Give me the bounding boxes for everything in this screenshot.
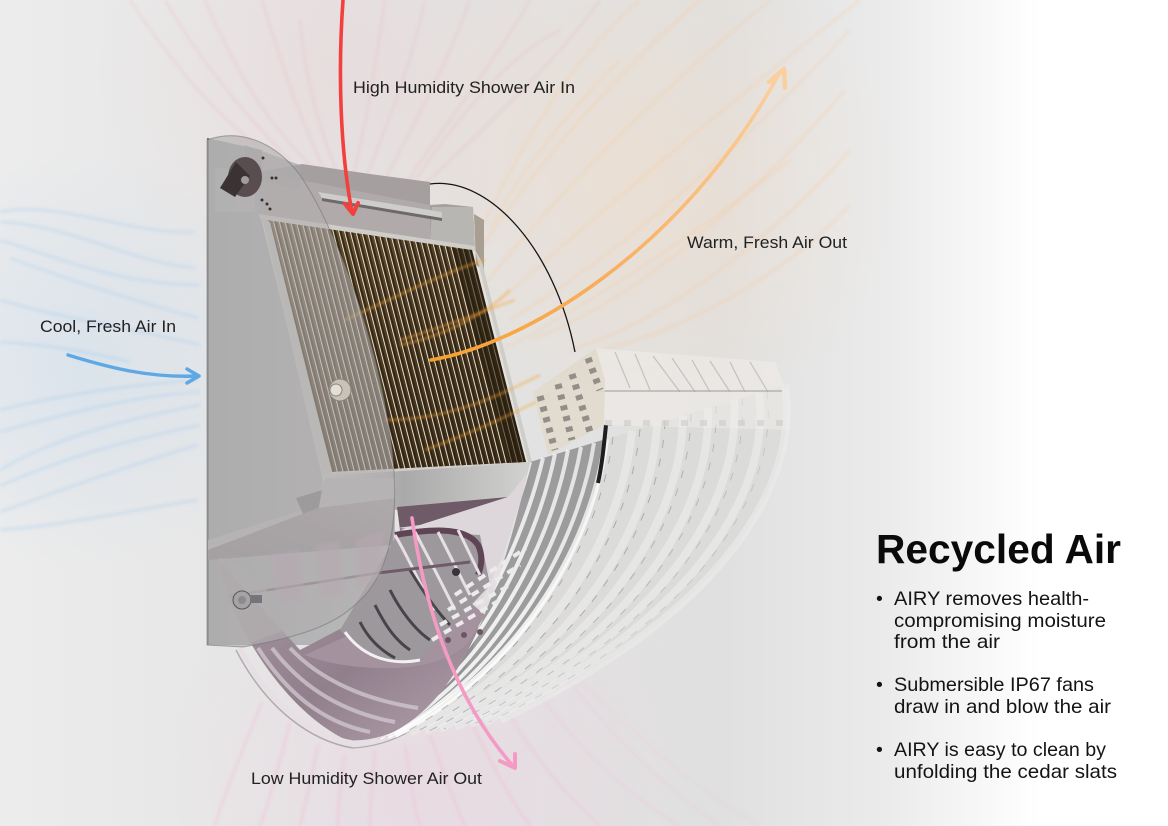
bullet list: •: [876, 588, 883, 610]
crossing slat gaps (light squares): [432, 548, 526, 640]
acrylic fastener: [329, 379, 351, 401]
label: high humidity shower air in: High Humidity Shower Air In: [353, 78, 575, 97]
device: AIRY unit: [207, 136, 790, 748]
black wire: [430, 183, 575, 352]
ledge under body: [208, 498, 395, 560]
arrow: high humidity air in: [340, 0, 358, 214]
orange flow seen through the exchanger: [345, 260, 550, 450]
bullet list: AIRY removes health-: [894, 588, 1089, 610]
arrow: cool fresh air in: [68, 355, 199, 383]
orange airflow wisps: [440, 0, 860, 380]
arrow: low humidity air out: [412, 518, 515, 768]
blue airflow wisps: [0, 209, 200, 530]
red airflow wisps: [130, 0, 600, 185]
bullet list: compromising moisture: [894, 610, 1106, 632]
fan mechanism behind flap: [230, 530, 490, 662]
exchanger frame: [262, 218, 532, 480]
bowl of folded slats: [218, 560, 485, 748]
bullet list: AIRY is easy to clean by: [894, 739, 1106, 761]
bullet list: •: [876, 674, 883, 696]
dark sliver under band: [397, 497, 508, 530]
bullet list: •: [876, 739, 883, 761]
panel: recycled air text: [876, 526, 1121, 783]
pale area beneath band: [397, 470, 530, 610]
bullet list: [876, 588, 1117, 783]
unfolding cedar slat fan: [350, 385, 790, 745]
pink airflow wisps: [215, 515, 760, 826]
label: cool fresh air in: Cool, Fresh Air In: [40, 317, 176, 336]
top ends of slats: [595, 348, 790, 430]
heading: Recycled Air: [876, 526, 1121, 572]
heat exchanger fins: [262, 218, 532, 480]
top housing: [245, 145, 484, 270]
label: low humidity shower air out: Low Humidity Shower Air Out: [251, 769, 482, 788]
silver lower band: [208, 463, 530, 552]
clear acrylic end disc: [207, 136, 395, 647]
label: warm fresh air out: Warm, Fresh Air Out: [687, 233, 847, 252]
bullet list: Submersible IP67 fans: [894, 674, 1094, 696]
bullet list: draw in and blow the air: [894, 696, 1112, 718]
bullet list: from the air: [894, 631, 1001, 653]
arrow: warm fresh air out: [431, 69, 785, 360]
mauve reflections in disc: [270, 530, 385, 605]
bolt on flap pivot: [233, 591, 262, 609]
flap end rivets: [445, 629, 483, 643]
bullet list: unfolding the cedar slats: [894, 761, 1117, 783]
wall plate: [207, 138, 395, 645]
control knob: [215, 156, 278, 212]
comb teeth on slat ends: [533, 348, 605, 455]
